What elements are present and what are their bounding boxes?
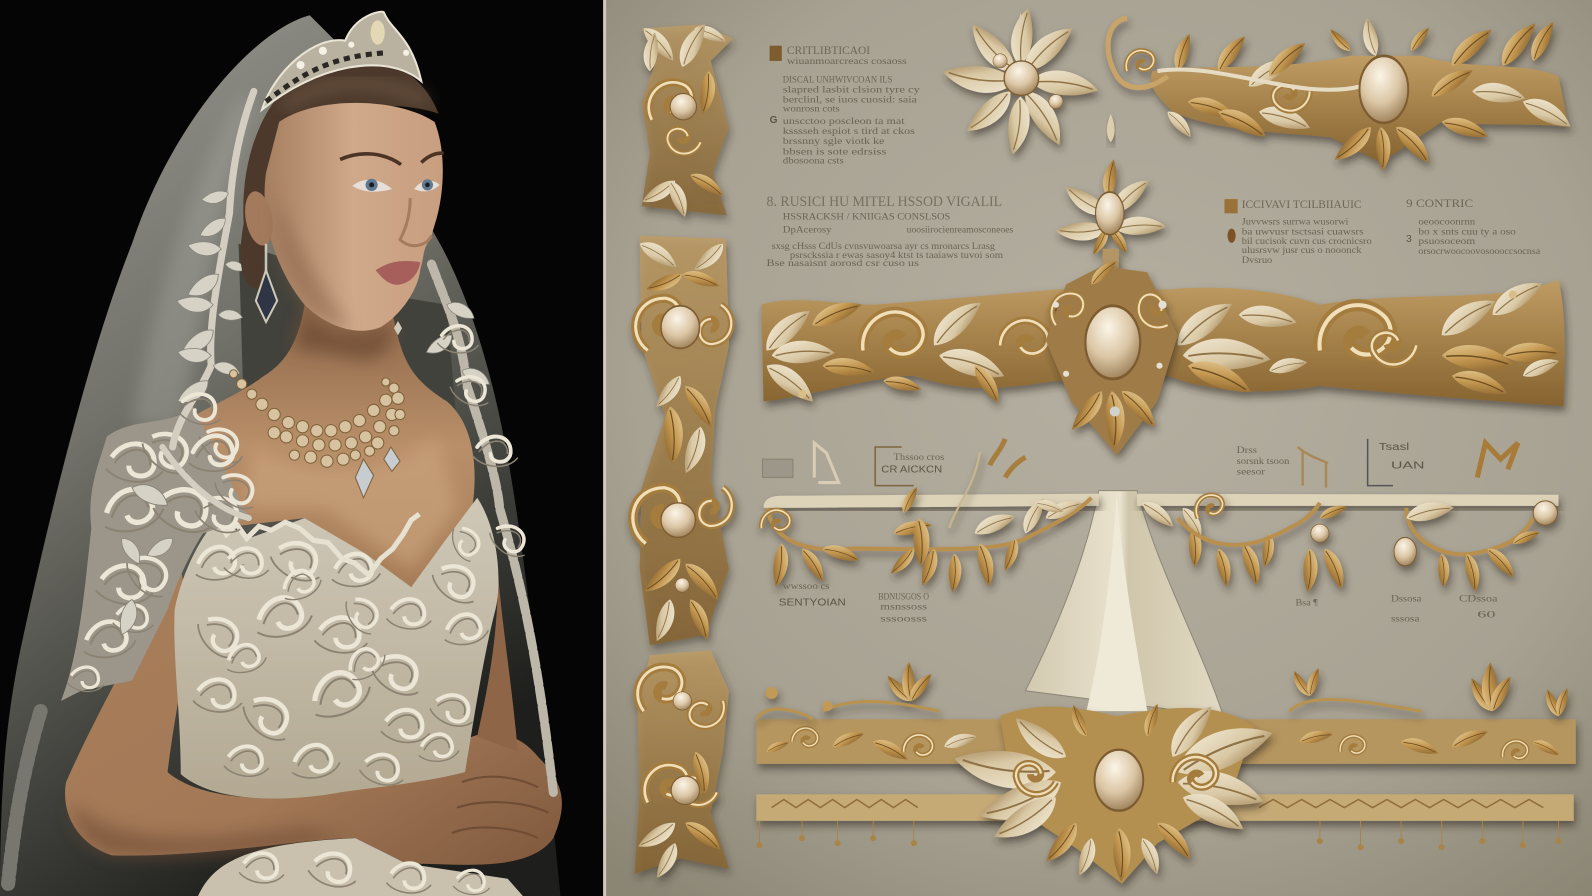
veil shadow behind neck bbox=[239, 244, 457, 427]
text block: main heading: Bse nasaisnt aorosd csr cuso us bbox=[767, 258, 919, 268]
strip between panels bbox=[603, 0, 606, 896]
labels row upper: seesor bbox=[1237, 466, 1265, 476]
text block: right contents: 9 CONTRIC bbox=[1406, 198, 1473, 210]
veil lace trim right bbox=[423, 264, 553, 792]
nose shadow bbox=[400, 198, 432, 246]
dress bodice bbox=[174, 498, 499, 799]
text block: materials list: G bbox=[770, 115, 778, 126]
labels row upper: UAN bbox=[1391, 460, 1424, 471]
text block: materials list: wonrosn cots bbox=[783, 104, 840, 114]
ear bbox=[241, 189, 277, 248]
text block: right materials bbox=[1224, 199, 1372, 265]
ornament: left column bottom bbox=[627, 650, 731, 882]
panel: bride portrait bbox=[0, 12, 562, 896]
labels row lower: Dssosa bbox=[1391, 593, 1421, 603]
eyebrows bbox=[340, 153, 444, 165]
text block: materials list: berclinl, se iuos cuosid: saia bbox=[783, 95, 917, 105]
labels row upper: Thssoo cros bbox=[893, 452, 945, 462]
dress lace curls bbox=[190, 514, 491, 895]
text block: main heading: uoosiirocienreamosconeoes bbox=[907, 225, 1014, 235]
neck shadow bbox=[294, 310, 392, 361]
text block: materials list: bbsen is sote edrsiss bbox=[783, 146, 887, 156]
labels row lower: 60 bbox=[1477, 610, 1496, 620]
heading: CRITLIBTICAOI bbox=[787, 45, 870, 57]
earring bbox=[256, 244, 277, 322]
text block: materials list: wiuanmoarcreacs cosaoss bbox=[787, 56, 907, 66]
text block: materials list: unscctoo poscleon ta mat bbox=[783, 116, 905, 126]
sketch: figure right bbox=[1298, 447, 1328, 488]
ornament: drape bbox=[1025, 491, 1223, 716]
small sketches row bbox=[762, 439, 1518, 488]
labels row lower: wwssoo cs bbox=[783, 581, 830, 591]
chest light bbox=[244, 437, 457, 569]
arms and hands bbox=[65, 554, 562, 865]
veil lace trim left bbox=[8, 91, 263, 884]
hair bbox=[241, 56, 439, 290]
right eye bbox=[414, 179, 440, 191]
dress skirt bbox=[198, 838, 523, 896]
ornament: drape fold bbox=[1086, 492, 1147, 711]
text block: right contents: oeoocoonrnn bbox=[1418, 217, 1476, 227]
panel: portrait background bbox=[0, 0, 604, 896]
chest and neck bbox=[162, 305, 475, 587]
sketch: bracket right bbox=[1368, 439, 1393, 486]
icon: square swatch bbox=[770, 46, 782, 61]
text block: right contents: psuosoceom bbox=[1418, 236, 1475, 246]
text block: main heading: psrsckssia r ewas sasoy4 ktst ts taaiaws tuvoi som bbox=[790, 250, 1003, 260]
labels row lower: CDssoa bbox=[1459, 593, 1498, 603]
text block: main heading bbox=[767, 194, 1014, 268]
text block: right contents: orsocrwoocoovosoooccsocnsa bbox=[1418, 246, 1540, 256]
text block: right materials: ulusrsvw jusr cus o nooonck bbox=[1242, 245, 1362, 255]
face bbox=[265, 103, 443, 331]
text block: materials list: slapred lasbit clsion tyre cy bbox=[783, 84, 920, 94]
icon: drop top bbox=[1018, 12, 1022, 24]
text block: materials list bbox=[770, 45, 920, 166]
ornament: rod bbox=[764, 494, 1558, 508]
labels row lower: msnssoss bbox=[880, 602, 928, 612]
sketch: square bbox=[762, 459, 793, 477]
text block: main heading: sxsg cHsss CdUs cvnsvuwoarsa ayr cs mronarcs Lrasg bbox=[772, 241, 995, 251]
labels row lower: SENTYOIAN bbox=[779, 597, 846, 608]
ornament: garland left bbox=[757, 452, 1091, 593]
labels row lower bbox=[779, 581, 1498, 624]
veil highlight bbox=[132, 91, 254, 427]
labels row upper bbox=[881, 442, 1424, 476]
hair highlight bbox=[284, 84, 426, 107]
ornament: bottom center flower bbox=[951, 699, 1278, 884]
ornament: left column middle bbox=[623, 235, 739, 645]
ornament: top banner bbox=[1108, 17, 1576, 171]
labels row lower: sssoosss bbox=[880, 614, 928, 624]
panel: ornament sheet background bbox=[604, 0, 1592, 896]
text block: main heading: 8. RUSICI HU MITEL HSSOD VIGALIL bbox=[767, 194, 1002, 210]
head bbox=[241, 56, 444, 331]
text block: right contents: bo x snts cuu ty a oso bbox=[1418, 227, 1516, 237]
text block: right materials: Juvvwsrs surrwa wusorwi bbox=[1242, 217, 1349, 227]
labels row lower: BDNUSGOS O bbox=[878, 591, 929, 601]
text block: materials list: DISCAL UNHWIVCOAN ILS bbox=[783, 74, 892, 84]
text block: right materials: ICCIVAVI TCILBIIAUIC bbox=[1242, 199, 1362, 211]
ornament: top brooch bbox=[940, 6, 1100, 157]
ornament: left column top bbox=[639, 19, 733, 219]
upper band bbox=[756, 719, 1576, 764]
labels row upper: Drss bbox=[1237, 445, 1257, 455]
text block: right materials: ba uwvusr tsctsasi cuawsrs bbox=[1242, 227, 1364, 237]
lips bbox=[376, 261, 420, 285]
labels row upper: CR AICKCN bbox=[881, 464, 942, 475]
labels row lower: Bsa ¶ bbox=[1296, 597, 1319, 607]
sketch: bracket left bbox=[875, 447, 914, 486]
labels row lower: sssosa bbox=[1391, 614, 1419, 624]
text block: main heading: DpAcerosy bbox=[783, 225, 832, 235]
ornament: bottom bands bbox=[756, 719, 1576, 821]
ornament: central upper flower bbox=[1056, 158, 1166, 290]
icon: bronze leaf bbox=[1228, 229, 1236, 243]
text block: materials list: dbosoona csts bbox=[783, 156, 844, 166]
text block: right materials: Dvsruo bbox=[1242, 255, 1273, 265]
sketch: figure gold M bbox=[1477, 443, 1518, 477]
labels row upper: sorsnk tsoon bbox=[1237, 456, 1290, 466]
veil back bbox=[0, 15, 560, 896]
necklace bbox=[229, 370, 405, 498]
icon: bronze swatch bbox=[1224, 199, 1238, 213]
ornament: central medallion bbox=[1044, 257, 1178, 455]
text block: right materials: bil cucisok cuvn cus crocnicsro bbox=[1242, 236, 1372, 246]
cheek shadow bbox=[275, 193, 350, 327]
sketch: leaf left bbox=[990, 439, 1025, 477]
second earring bbox=[394, 321, 402, 335]
ornament: garland right bbox=[1139, 489, 1557, 593]
ornament: main banner bbox=[758, 274, 1565, 409]
lower band bbox=[756, 794, 1574, 821]
labels row upper: Tsasl bbox=[1379, 442, 1409, 453]
text block: right contents: 3 bbox=[1406, 234, 1412, 245]
ornament: top sprigs bbox=[756, 662, 1571, 719]
tiara bbox=[262, 12, 421, 110]
icon: drop small bbox=[1107, 114, 1115, 142]
shoulder lace sleeve bbox=[61, 406, 249, 701]
text block: materials list: brssnny sgle viotk ke bbox=[783, 136, 884, 146]
text block: main heading: HSSRACKSH / KNIIGAS CONSLSOS bbox=[783, 211, 950, 221]
left eye bbox=[352, 179, 392, 192]
text block: materials list: ksssseh espiot s tird at ckos bbox=[783, 126, 915, 136]
text block: right contents bbox=[1406, 198, 1540, 256]
sketch: figure left bbox=[814, 443, 839, 483]
ornament: hanging drops bbox=[756, 821, 1562, 850]
